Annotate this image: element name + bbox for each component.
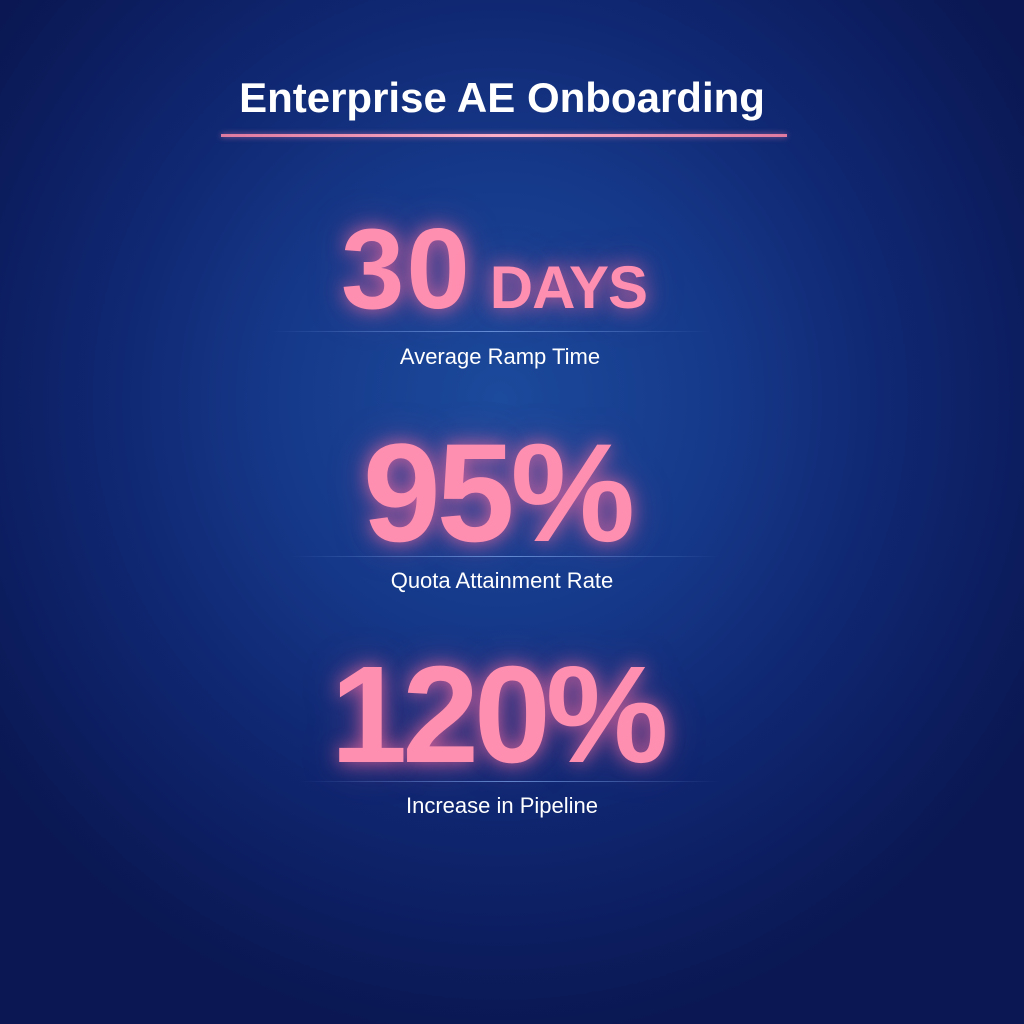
label: quota attainment: Quota Attainment Rate xyxy=(391,568,613,593)
stat: 95%: 95% xyxy=(363,414,631,571)
stat: 30 days: 30 DAYS xyxy=(341,206,647,333)
label: average ramp time: Average Ramp Time xyxy=(400,344,600,369)
label: increase in pipeline: Increase in Pipeline xyxy=(406,793,598,818)
title underline xyxy=(221,134,787,137)
stat: 120%: 120% xyxy=(331,638,663,792)
title: Enterprise AE Onboarding xyxy=(239,74,765,121)
